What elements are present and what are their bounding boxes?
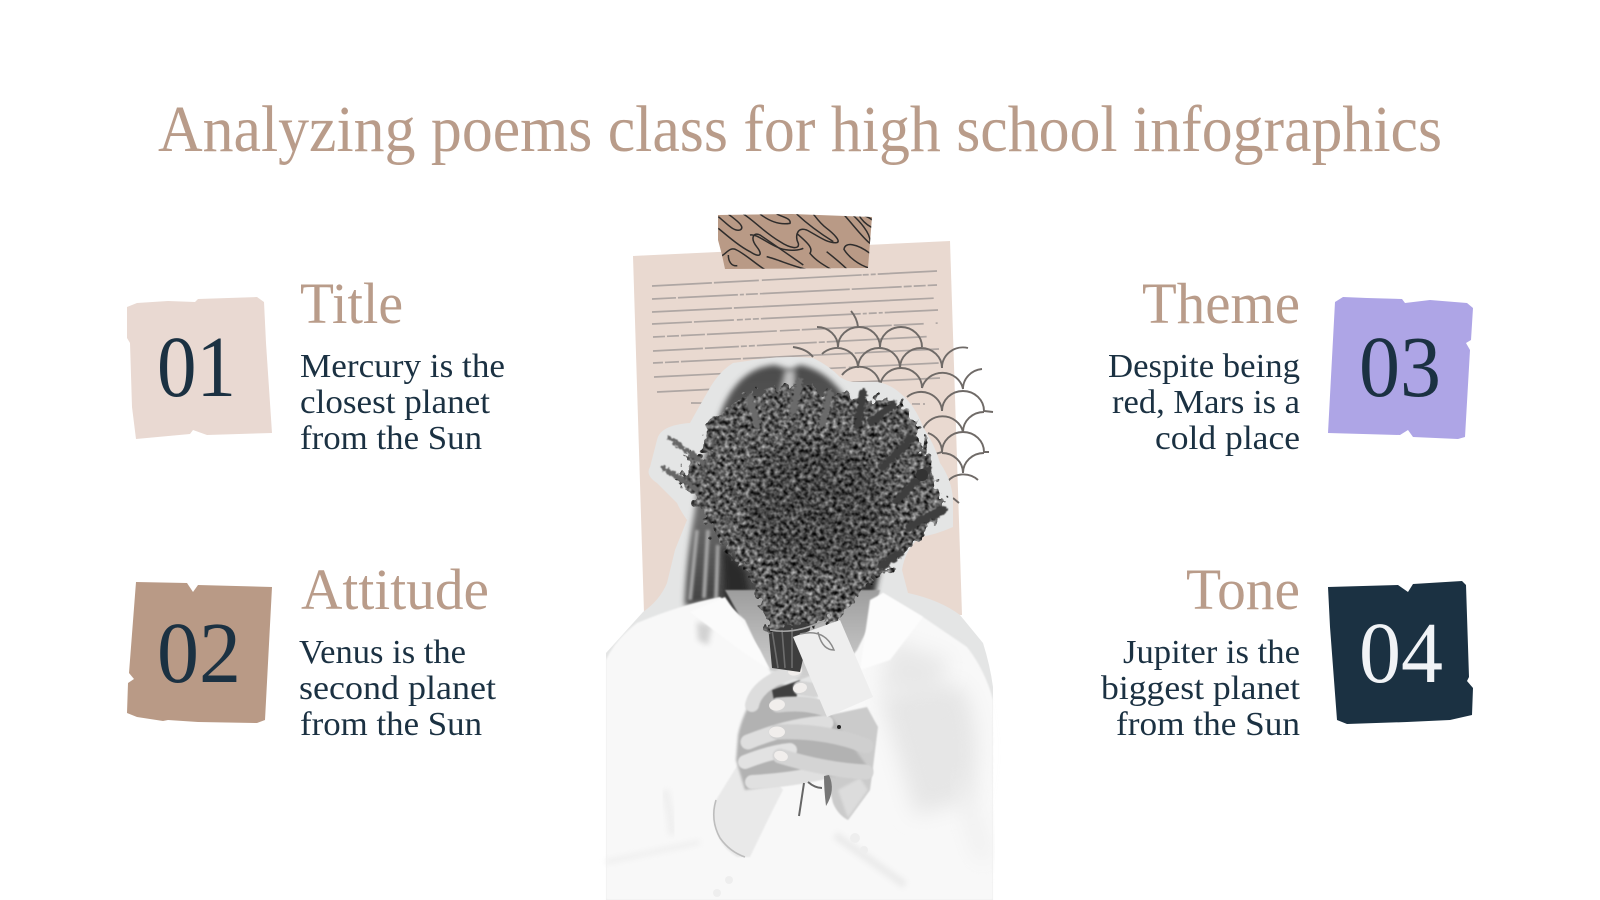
- text: Jupiter description: [1101, 634, 1301, 743]
- badge: 04: 04: [1359, 604, 1443, 701]
- bouquet: [663, 381, 945, 672]
- twine: [770, 620, 825, 631]
- text: Mars description: [1108, 348, 1300, 457]
- text: Mercury description: [300, 348, 505, 457]
- photo: woman holding lavender bouquet: [606, 357, 993, 900]
- hand base: [736, 683, 870, 790]
- paper note with ruled lines: [633, 241, 962, 615]
- badge: 02: [127, 582, 272, 723]
- text: Jupiter description: Jupiter is the: [1123, 634, 1300, 671]
- heading: Theme: Theme: [1142, 271, 1300, 336]
- stems below hands: [799, 782, 822, 816]
- text: Mars description: Despite being: [1108, 348, 1300, 385]
- badge: 03: [1328, 297, 1473, 439]
- badge: 03: 03: [1359, 318, 1441, 415]
- heading: Title: Title: [300, 271, 403, 336]
- text: Jupiter description: from the Sun: [1116, 706, 1300, 743]
- neck: [725, 590, 880, 680]
- text: Mars description: red, Mars is a: [1112, 384, 1300, 421]
- nails: [768, 665, 808, 763]
- badge: 01: 01: [157, 318, 236, 415]
- paper tag: [793, 620, 873, 717]
- text: Mercury description: from the Sun: [300, 420, 482, 457]
- right palm: [825, 707, 878, 820]
- left wrist: [713, 745, 783, 857]
- shirt: [606, 593, 993, 900]
- fingers: [745, 671, 866, 782]
- badge: 01: [127, 297, 272, 439]
- text: Venus description: [299, 634, 497, 743]
- hair: [685, 365, 880, 620]
- panel: 04 Tone: [1101, 557, 1473, 743]
- cut-out halo: [606, 357, 993, 900]
- text: Venus description: second planet: [299, 670, 497, 707]
- shirt collar folds: [860, 593, 923, 670]
- lavender sprigs: [663, 381, 943, 567]
- heading: Attitude: Attitude: [301, 557, 489, 622]
- panel: 03 Theme: [1108, 271, 1473, 457]
- washi tape: [717, 214, 873, 271]
- text: Mars description: cold place: [1155, 420, 1300, 457]
- text: Mercury description: closest planet: [300, 384, 491, 421]
- badge: 04: [1328, 581, 1473, 724]
- forearms and hands: [713, 665, 878, 857]
- text: Mercury description: Mercury is the: [300, 348, 505, 385]
- twine loop: [800, 632, 834, 650]
- panel: 01 Title: [127, 271, 505, 457]
- heading: Tone: Tone: [1186, 557, 1300, 622]
- cuff buttons: [713, 833, 868, 897]
- title: Analyzing poems class for high school infographics: [158, 93, 1442, 166]
- badge: 02: 02: [157, 604, 241, 701]
- text: Jupiter description: biggest planet: [1101, 670, 1301, 707]
- scale line pattern: [793, 311, 993, 503]
- text: Venus description: Venus is the: [299, 634, 466, 671]
- text: Venus description: from the Sun: [300, 706, 482, 743]
- panel: 02 Attitude: [127, 557, 497, 743]
